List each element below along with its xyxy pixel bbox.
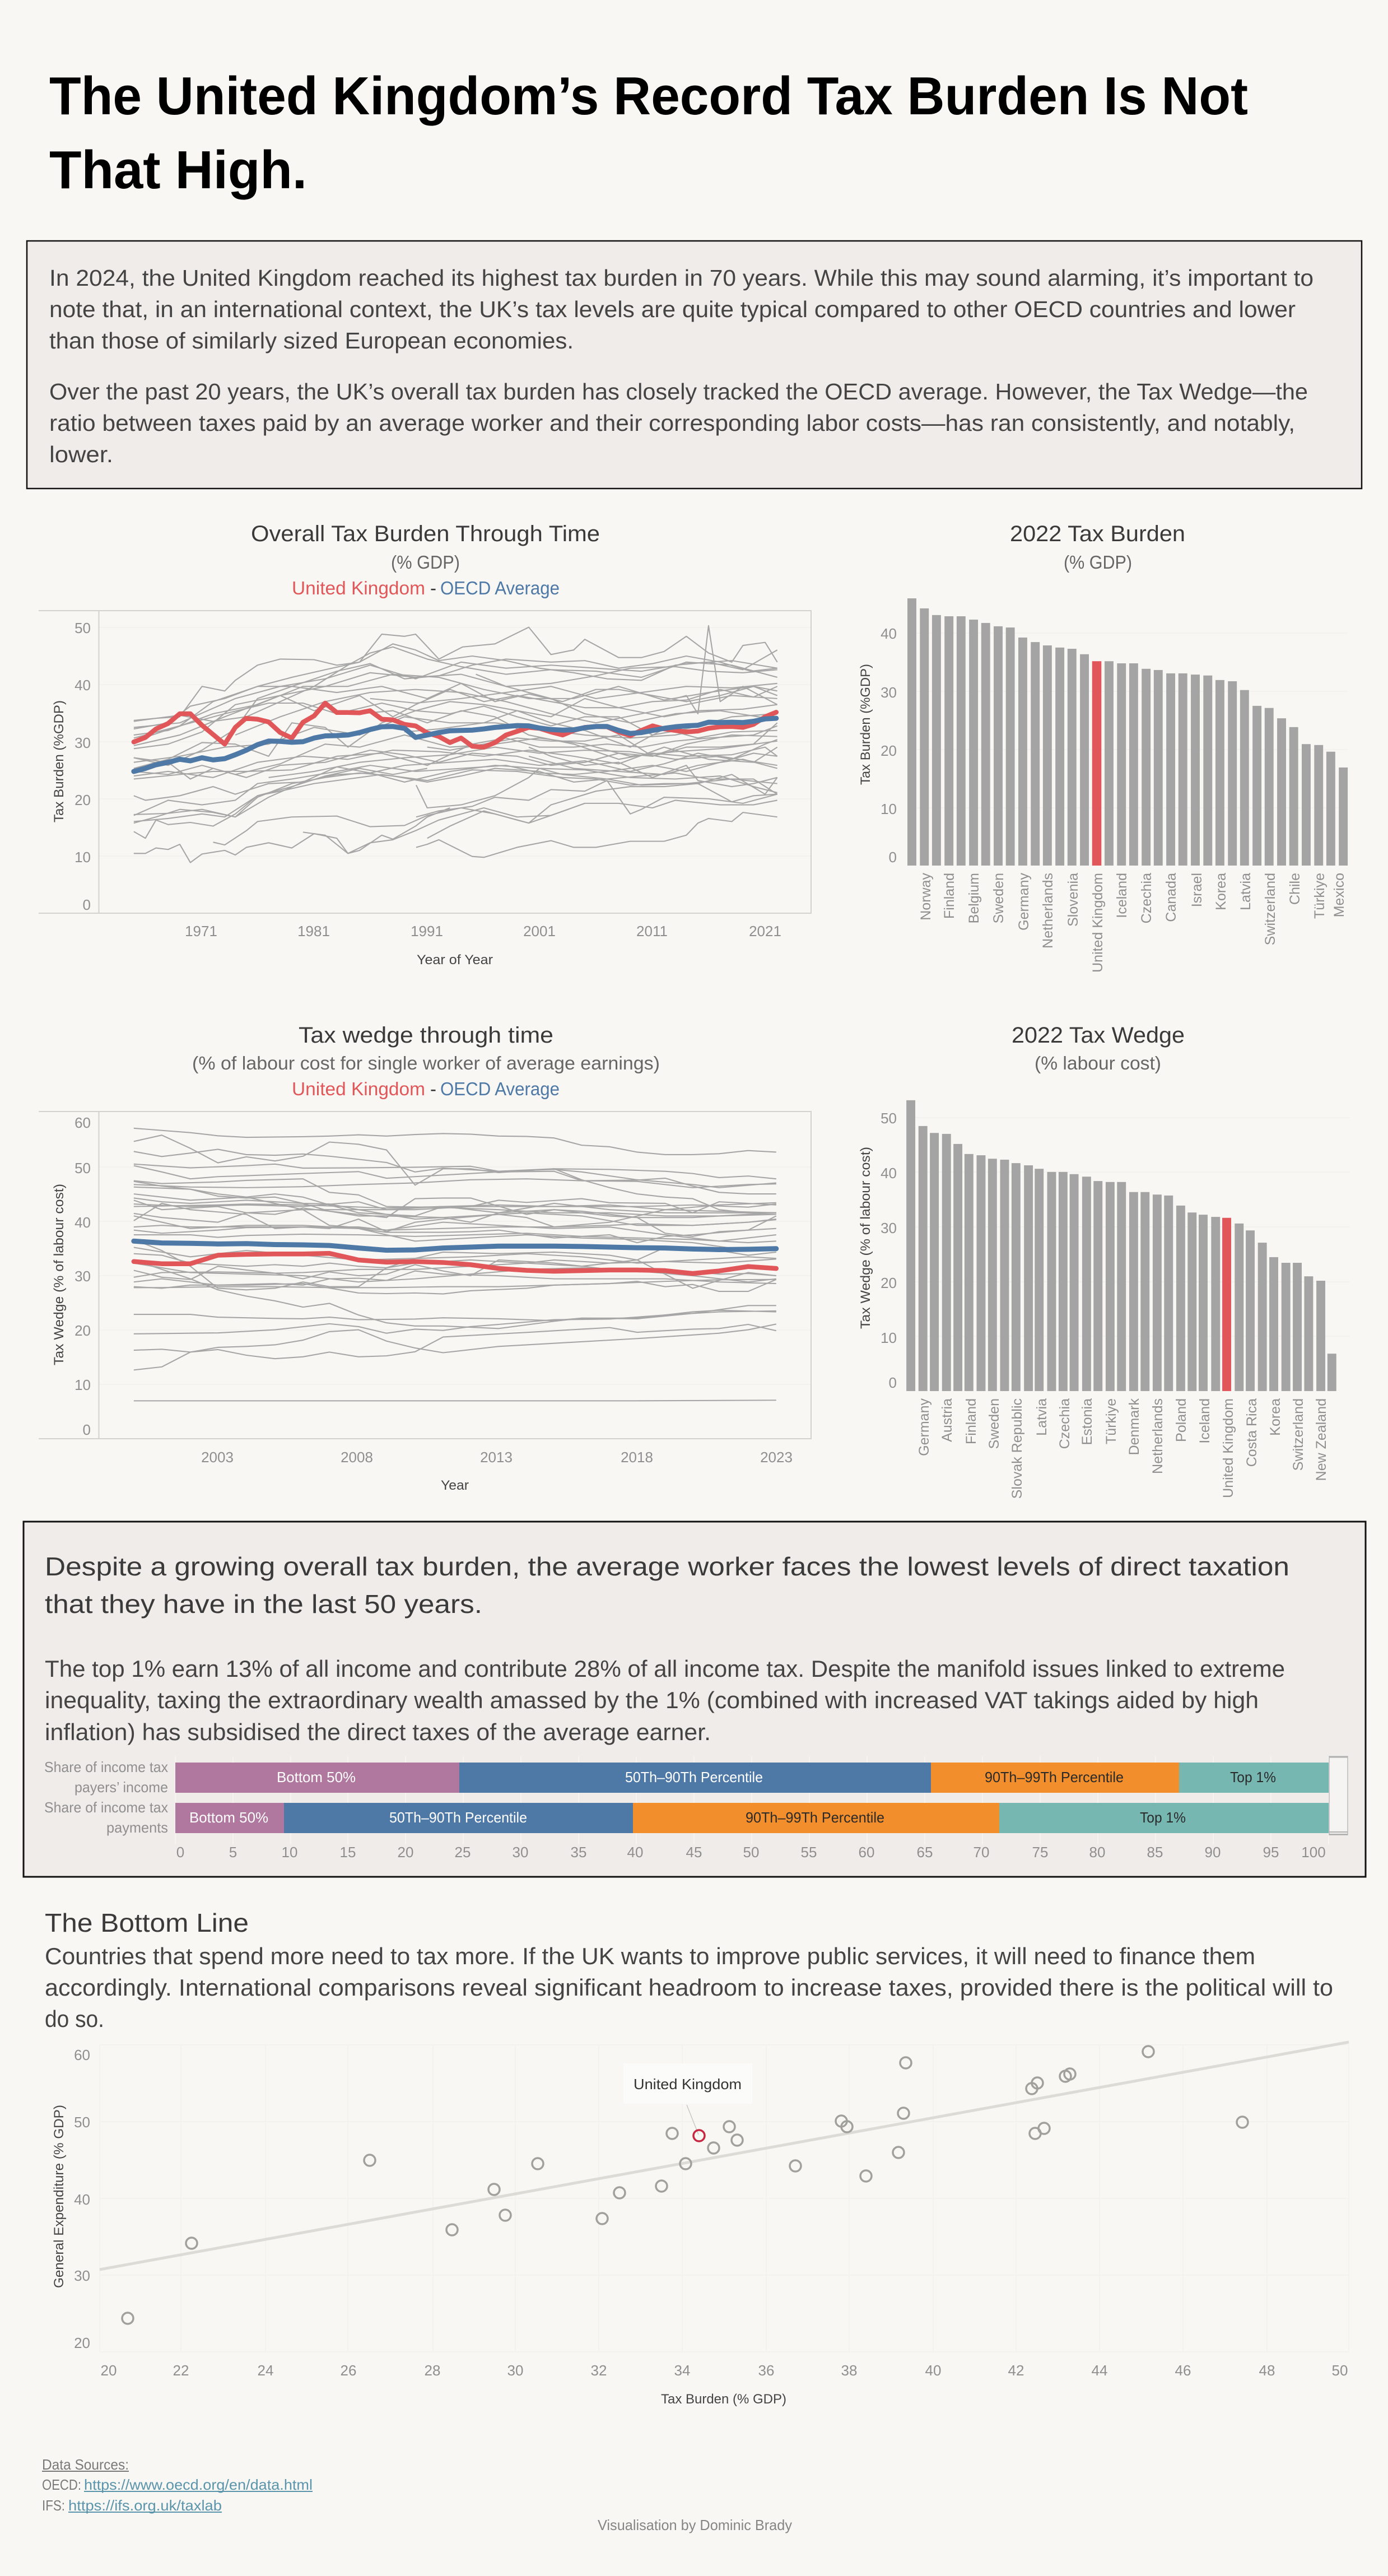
x axis labels: 50 (743, 1844, 759, 1861)
text block: the bottom line: do so. (45, 2006, 104, 2032)
x axis labels: 24 (258, 2362, 273, 2379)
axis title: tax burden: Tax Burden (%GDP) (52, 700, 67, 822)
axis title: tax wedge: Tax Wedge (% of labour cost) (858, 1147, 873, 1329)
row labels: Share of income tax (44, 1799, 168, 1816)
country labels: Chile (1287, 873, 1303, 905)
x axis labels: 75 (1032, 1844, 1048, 1861)
x axis labels: 10 (282, 1844, 297, 1861)
x axis labels: 48 (1259, 2362, 1275, 2379)
y axis labels (74, 1114, 91, 1438)
y axis labels: 0 (889, 849, 897, 866)
country labels: United Kingdom (1090, 873, 1106, 973)
panel: introduction (27, 241, 1362, 489)
country labels: Slovak Republic (1009, 1398, 1025, 1499)
x axis labels: 2021 (749, 923, 781, 940)
bar chart: 2022 tax burden (858, 598, 1348, 973)
panel: tax wedge through time (39, 1023, 811, 1493)
x axis labels: 28 (425, 2362, 440, 2379)
heading: 2022 tax wedge (1012, 1023, 1185, 1073)
y axis labels (74, 2047, 90, 2351)
country labels: Germany (1016, 873, 1032, 931)
y axis labels: 20 (74, 2335, 90, 2351)
x axis labels: 44 (1092, 2362, 1107, 2379)
y axis labels: 10 (74, 1377, 91, 1393)
line chart: tax wedge by country (39, 1112, 811, 1493)
country labels: Netherlands (1040, 873, 1056, 948)
axis title: tax wedge: Tax Wedge (% of labour cost) (52, 1184, 67, 1365)
data sources: Data Sources: (42, 2456, 129, 2473)
bar: share of income tax payers' income: 90Th–99Th Percentile (985, 1769, 1124, 1785)
y axis labels: 50 (881, 1110, 897, 1127)
row labels: payments (106, 1819, 168, 1836)
x axis labels: 34 (674, 2362, 690, 2379)
data points (122, 2046, 1248, 2324)
country labels: Switzerland (1263, 873, 1278, 945)
x axis labels: 85 (1147, 1844, 1163, 1861)
credit: Visualisation by Dominic Brady (598, 2517, 792, 2533)
axis title: tax burden: Tax Burden (%GDP) (858, 664, 873, 785)
country labels: Netherlands (1150, 1398, 1166, 1474)
scrollbar (1329, 1756, 1348, 1835)
country labels: Türkiye (1312, 873, 1328, 919)
x axis labels: 60 (859, 1844, 874, 1861)
heading: chart one title: OECD Average (440, 578, 560, 598)
bar: share of income tax payments: 90Th–99Th Percentile (746, 1809, 884, 1826)
y axis labels: 40 (881, 1165, 897, 1182)
country labels: Canada (1163, 873, 1179, 922)
x axis labels: 30 (507, 2362, 523, 2379)
x axis labels: 2008 (341, 1449, 373, 1466)
line chart: tax burden by country (39, 611, 811, 968)
y axis labels: 0 (83, 896, 91, 913)
x axis labels: 55 (801, 1844, 817, 1861)
y axis labels: 40 (74, 2191, 90, 2208)
line: United Kingdom tax burden (134, 703, 776, 747)
y axis labels: 30 (74, 734, 91, 751)
trend line (100, 2042, 1349, 2270)
panel: overall tax burden through time (39, 522, 811, 968)
country labels: United Kingdom (1221, 1398, 1236, 1498)
y axis labels (881, 1110, 897, 1391)
x axis labels (176, 1844, 1326, 1861)
row labels: payers’ income (74, 1779, 168, 1796)
x axis labels: 20 (398, 1844, 413, 1861)
country labels (916, 1398, 1329, 1499)
heading: tax wedge title (192, 1023, 660, 1099)
heading: direct taxation: that they have in the last 50 years. (45, 1589, 482, 1619)
x axis labels: 26 (341, 2362, 356, 2379)
y axis labels: 50 (74, 2114, 90, 2131)
y axis labels: 60 (74, 1114, 91, 1131)
heading: the bottom line: The Bottom Line (45, 1908, 249, 1937)
text block: intro paragraph one: In 2024, the United Kingdom reached its highest tax burden in 70 years. While this may sound alarming, it’s important to (49, 265, 1314, 291)
country labels: Türkiye (1103, 1398, 1119, 1444)
heading: tax wedge title: OECD Average (440, 1078, 560, 1099)
text block: top one percent: inflation) has subsidised the direct taxes of the average earner. (45, 1719, 711, 1745)
text block: the bottom line: Countries that spend more need to tax more. If the UK wants to improve public services, it will need to finance them (45, 1943, 1255, 1969)
x axis labels: 2011 (636, 923, 668, 940)
x axis labels: 1981 (297, 923, 330, 940)
heading: 2022 tax burden: (% GDP) (1064, 552, 1132, 573)
row labels (44, 1759, 168, 1836)
y axis labels (881, 625, 897, 866)
country labels: Czechia (1139, 873, 1154, 923)
y axis labels: 10 (881, 1329, 897, 1346)
row labels: Share of income tax (44, 1759, 168, 1775)
x axis labels: 1991 (411, 923, 443, 940)
heading: direct taxation: Despite a growing overall tax burden, the average worker faces the lowest levels of direct taxation (45, 1552, 1289, 1581)
x axis labels: 2003 (201, 1449, 234, 1466)
country labels: Poland (1173, 1398, 1189, 1442)
country labels: Finland (942, 873, 957, 919)
x axis labels: 46 (1175, 2362, 1191, 2379)
title: That High. (49, 140, 307, 200)
y axis labels: 10 (881, 801, 897, 817)
country labels: Korea (1213, 873, 1229, 910)
heading: tax wedge title: United Kingdom (292, 1078, 425, 1099)
stacked bar chart: income and tax shares (44, 1756, 1348, 1861)
x axis labels: 65 (917, 1844, 933, 1861)
bar: United Kingdom (1092, 661, 1101, 866)
bar: share of income tax payers' income (175, 1763, 1329, 1793)
heading: chart one title (251, 522, 600, 598)
scatter plot: tax burden vs general expenditure (52, 2042, 1349, 2407)
y axis labels: 20 (74, 792, 91, 808)
bar chart: 2022 tax wedge (858, 1100, 1350, 1499)
country labels: New Zealand (1314, 1398, 1329, 1481)
country labels: Iceland (1114, 873, 1130, 918)
bar: share of income tax payers' income: Top 1% (1230, 1769, 1276, 1785)
x axis labels: 1971 (185, 923, 217, 940)
country labels: Iceland (1197, 1398, 1213, 1444)
x axis labels: 42 (1008, 2362, 1024, 2379)
axis title: general expenditure: General Expenditure (% GDP) (52, 2105, 67, 2288)
x axis labels: 70 (974, 1844, 989, 1861)
x axis labels: 32 (591, 2362, 607, 2379)
axis title: year: Year of Year (417, 952, 493, 968)
bar: share of income tax payers' income: 50Th–90Th Percentile (625, 1769, 763, 1785)
y axis labels: 20 (881, 742, 897, 759)
x axis labels: 25 (455, 1844, 471, 1861)
bar: share of income tax payments: Bottom 50% (189, 1809, 268, 1826)
callout: United Kingdom (623, 2063, 752, 2141)
x axis labels: 0 (176, 1844, 184, 1861)
y axis labels: 40 (74, 677, 91, 694)
text block: top one percent: The top 1% earn 13% of all income and contribute 28% of all income tax. Despite the manifold issues linked to extreme (45, 1656, 1285, 1682)
x axis labels: 22 (173, 2362, 189, 2379)
x axis labels: 35 (571, 1844, 586, 1861)
line: OECD average tax burden (134, 718, 776, 771)
country labels: Sweden (991, 873, 1007, 923)
y axis labels: 10 (74, 849, 91, 866)
country labels: Costa Rica (1244, 1398, 1260, 1467)
country labels: Latvia (1034, 1398, 1050, 1436)
x axis labels (185, 923, 781, 940)
heading: chart one title: Overall Tax Burden Through Time (251, 522, 600, 546)
line: United Kingdom tax wedge (134, 1253, 776, 1273)
text block: intro paragraph two: ratio between taxes paid by an average worker and their corresponding labor costs—has ran consistently, and notably, (49, 410, 1295, 436)
data sources: https://www.oecd.org/en/data.html (84, 2476, 313, 2493)
bar: share of income tax payers' income: Bottom 50% (277, 1769, 356, 1785)
country labels: Norway (918, 873, 934, 920)
country labels: Belgium (966, 873, 982, 923)
title: The United Kingdom’s Record Tax Burden Is Not (49, 66, 1248, 126)
x axis labels: 30 (513, 1844, 528, 1861)
text block: intro paragraph one: note that, in an international context, the UK’s tax levels are quite typical compared to other OECD countries and lower (49, 296, 1296, 322)
heading: tax wedge title: (% of labour cost for single worker of average earnings) (192, 1053, 660, 1073)
x axis labels: 95 (1263, 1844, 1279, 1861)
y axis labels: 30 (881, 1220, 897, 1236)
data sources: IFS: (42, 2497, 65, 2514)
data sources: OECD: (42, 2476, 81, 2493)
line: OECD average tax wedge (134, 1241, 776, 1250)
country labels: Switzerland (1291, 1398, 1306, 1471)
bar: share of income tax payments (175, 1803, 1329, 1833)
text block: top one percent (45, 1656, 1285, 1745)
country labels: Czechia (1057, 1398, 1073, 1449)
heading: chart one title: (% GDP) (391, 552, 460, 573)
x axis labels: 2018 (621, 1449, 653, 1466)
data sources: https://ifs.org.uk/taxlab (68, 2497, 222, 2514)
bar: share of income tax payments: 50Th–90Th Percentile (389, 1809, 527, 1826)
axis title: tax burden: Tax Burden (% GDP) (661, 2392, 786, 2407)
bar: share of income tax payments: Top 1% (1140, 1809, 1186, 1826)
text block: intro paragraph two: lower. (49, 441, 113, 467)
x axis labels: 2013 (480, 1449, 513, 1466)
y axis labels: 30 (74, 1268, 91, 1285)
y axis labels: 50 (74, 620, 91, 636)
x axis labels: 15 (340, 1844, 356, 1861)
country labels: Denmark (1126, 1398, 1142, 1455)
x axis labels: 45 (686, 1844, 702, 1861)
panel: 2022 tax wedge (858, 1023, 1350, 1499)
text block: intro paragraph two (49, 379, 1308, 467)
x axis labels: 40 (627, 1844, 643, 1861)
x axis labels: 20 (101, 2362, 117, 2379)
heading: 2022 tax wedge: (% labour cost) (1035, 1053, 1161, 1073)
text block: intro paragraph one: than those of similarly sized European economies. (49, 328, 574, 354)
y axis labels: 20 (74, 1322, 91, 1339)
text block: the bottom line: accordingly. International comparisons reveal significant headroom to increase taxes, provided there is the political will to (45, 1974, 1333, 2001)
y axis labels: 40 (881, 625, 897, 642)
country labels: Sweden (986, 1398, 1002, 1449)
x axis labels: 38 (841, 2362, 857, 2379)
country labels: Estonia (1079, 1398, 1095, 1445)
x axis labels (101, 2362, 1348, 2379)
y axis labels: 30 (74, 2267, 90, 2284)
heading: tax wedge title: - (430, 1078, 436, 1099)
country labels: Latvia (1238, 873, 1254, 910)
x axis labels: 36 (758, 2362, 774, 2379)
y axis labels: 40 (74, 1214, 91, 1231)
x axis labels: 2023 (760, 1449, 793, 1466)
bar: United Kingdom (1222, 1218, 1231, 1391)
panel: 2022 tax burden (858, 522, 1348, 973)
y axis labels: 60 (74, 2047, 90, 2063)
country labels: Germany (916, 1398, 932, 1456)
x axis labels: 80 (1089, 1844, 1105, 1861)
y axis labels: 50 (74, 1160, 91, 1177)
x axis labels: 100 (1301, 1844, 1326, 1861)
country labels (918, 873, 1347, 973)
heading: 2022 tax burden: 2022 Tax Burden (1010, 522, 1185, 546)
x axis labels: 50 (1332, 2362, 1348, 2379)
heading: chart one title: - (430, 578, 436, 598)
x axis labels (201, 1449, 793, 1466)
heading: 2022 tax wedge: 2022 Tax Wedge (1012, 1023, 1185, 1048)
country labels: Austria (939, 1398, 955, 1442)
y axis labels (74, 620, 91, 913)
x axis labels: 40 (925, 2362, 941, 2379)
country labels: Finland (963, 1398, 979, 1444)
x axis labels: 2001 (523, 923, 556, 940)
country labels: Mexico (1331, 873, 1347, 917)
y axis labels: 30 (881, 684, 897, 701)
heading: tax wedge title: Tax wedge through time (299, 1023, 553, 1048)
country labels: Israel (1189, 873, 1205, 907)
y axis labels: 0 (83, 1421, 91, 1438)
data sources (42, 2456, 313, 2514)
country labels: Slovenia (1065, 873, 1081, 927)
text block: the bottom line (45, 1943, 1333, 2032)
heading: direct taxation (45, 1552, 1289, 1619)
x axis labels: 5 (229, 1844, 237, 1861)
heading: 2022 tax burden (1010, 522, 1185, 573)
y axis labels: 0 (889, 1374, 897, 1391)
axis title: year: Year (441, 1478, 469, 1493)
callout: United Kingdom: United Kingdom (634, 2076, 742, 2093)
text block: top one percent: inequality, taxing the extraordinary wealth amassed by the 1% (combined with increased VAT takings aided by high (45, 1687, 1259, 1713)
country labels: Korea (1268, 1398, 1283, 1436)
title (49, 66, 1248, 200)
text block: intro paragraph one (49, 265, 1314, 354)
text block: intro paragraph two: Over the past 20 years, the UK’s overall tax burden has closely tracked the OECD average. However, the Tax Wedge—the (49, 379, 1308, 404)
heading: chart one title: United Kingdom (292, 578, 425, 598)
panel: income tax distribution (24, 1522, 1366, 1877)
y axis labels: 20 (881, 1275, 897, 1291)
x axis labels: 90 (1205, 1844, 1221, 1861)
